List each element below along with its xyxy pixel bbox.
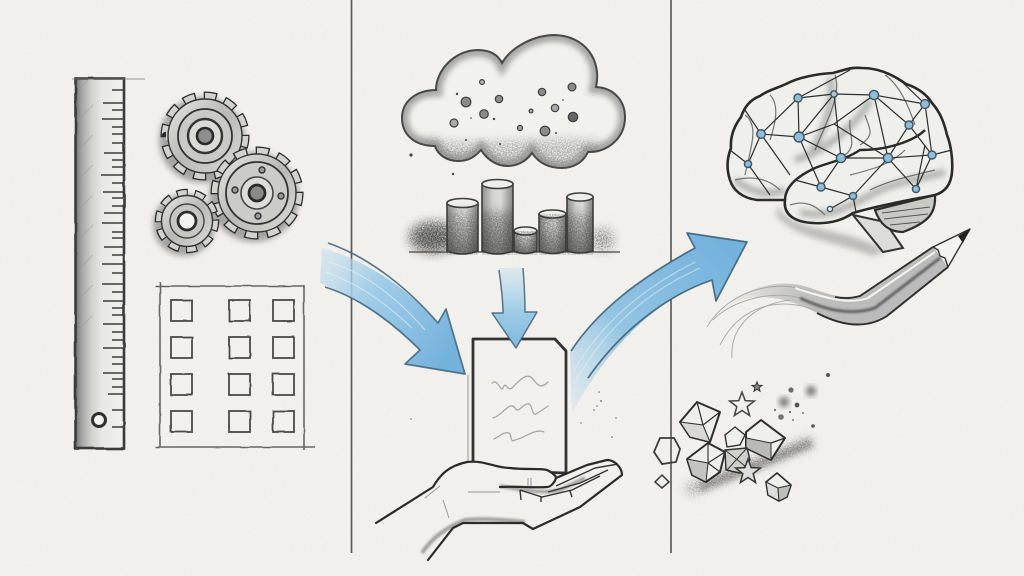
divider left [350, 0, 352, 553]
gear small [160, 194, 214, 248]
icon: geometric shapes [654, 373, 830, 501]
gear shadow [153, 97, 299, 256]
icon: gears [153, 97, 299, 256]
brain shadow [776, 205, 885, 256]
cerebrum [727, 68, 952, 223]
icon: ruler [72, 76, 145, 449]
brain folds [735, 75, 935, 215]
temporal lobe fold [785, 130, 925, 200]
polyhedron right [766, 473, 791, 501]
gear top [166, 97, 244, 175]
small diamond [655, 475, 669, 488]
brain stem [853, 215, 903, 252]
small hexagon [725, 427, 745, 447]
pencil body [722, 247, 948, 324]
finger lines [520, 464, 618, 502]
heptagon outline [654, 438, 680, 464]
arrow: from document to right panel [570, 233, 747, 413]
icon: document [468, 339, 566, 473]
cylinder 4 [539, 210, 566, 254]
shapes ground shadow [687, 441, 812, 491]
polyhedron upper [680, 402, 720, 442]
cylinder stipple [440, 212, 600, 256]
arrow: from chart into document [492, 268, 537, 348]
cylinder 5 [567, 193, 593, 253]
pencil trail [707, 286, 870, 358]
prism [725, 448, 750, 473]
brain shading [735, 78, 945, 214]
cloud particles [409, 80, 578, 175]
pencil tip [933, 229, 970, 267]
gear right [216, 152, 298, 234]
ruler ticks [101, 90, 123, 427]
palm shading [422, 478, 585, 553]
divider right [670, 0, 672, 553]
speckles near arrow [410, 391, 617, 438]
icon: open hand [376, 460, 622, 560]
network edges [730, 70, 952, 212]
star tiny [752, 382, 762, 391]
star lower [736, 459, 760, 482]
network nodes [744, 90, 936, 212]
bar chart: cylinders [409, 180, 620, 256]
ruler hole [92, 414, 106, 426]
cerebellum [875, 195, 935, 232]
icon: grid of squares [155, 282, 315, 450]
document scribbles [492, 376, 548, 441]
icon: cloud with particles [402, 35, 625, 175]
cylinder 1 [447, 198, 478, 254]
star upper [730, 392, 754, 416]
icon: pencil with trailing strokes [707, 229, 970, 358]
icon: brain with network [727, 68, 952, 256]
dust cloud [774, 373, 830, 428]
polyhedron lower [687, 443, 725, 482]
cylinder 2 [482, 180, 513, 254]
chart ground shading [409, 221, 614, 253]
cylinder 3 [514, 227, 537, 254]
box [746, 420, 785, 460]
arrow: from left panel into document [320, 243, 465, 374]
